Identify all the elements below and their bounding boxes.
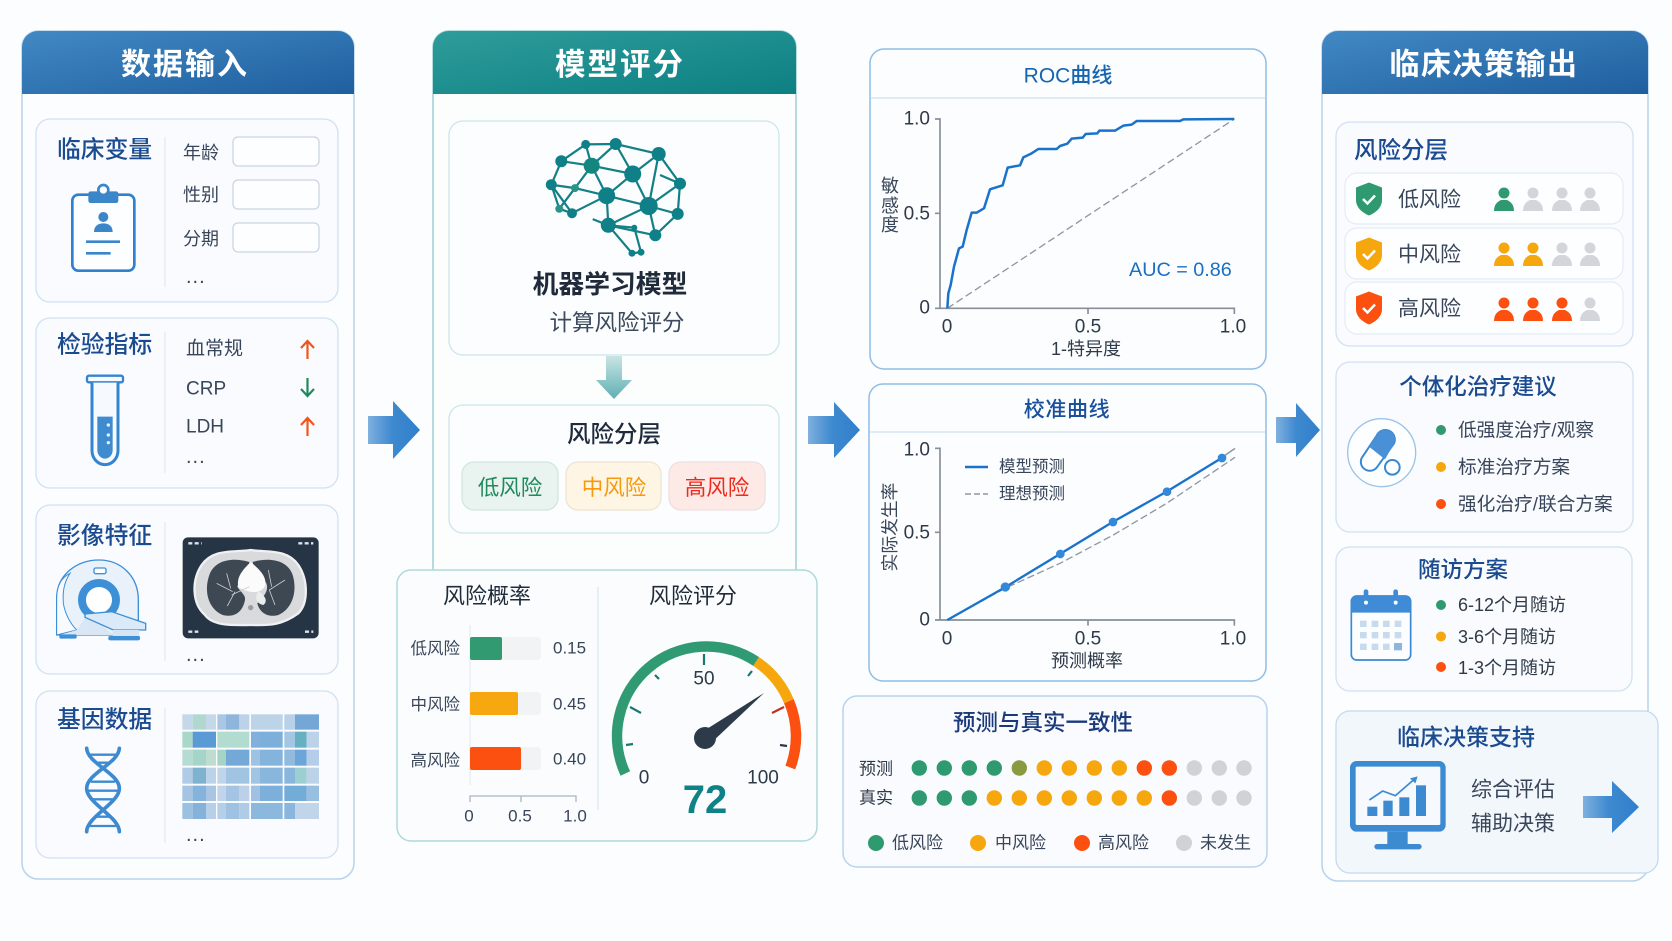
bar chart: risk probability: 低风险 — [410, 639, 460, 658]
panel: prediction vs actual agreement: 真实 — [859, 788, 893, 808]
bar chart: risk probability: 1.0 — [563, 806, 587, 826]
row: medium risk: 中风险 — [1398, 244, 1461, 266]
panel: calibration curve: 1.0 — [1220, 628, 1246, 650]
card: genomic data: ... — [186, 824, 206, 846]
card: imaging features — [36, 505, 338, 674]
legend: agreement — [868, 834, 1251, 852]
card: clinical variables: 年龄 — [183, 143, 219, 163]
panel: ROC curve: 度 — [881, 215, 899, 235]
panel: calibration curve: 校准曲线 — [1024, 398, 1110, 422]
card: follow-up plan: 1-3个月随访 — [1458, 658, 1556, 678]
row: low risk: 低风险 — [1398, 188, 1461, 212]
row: low risk — [1345, 173, 1623, 224]
panel: calibration curve: 0.5 — [1075, 628, 1101, 650]
gauge needle — [694, 693, 764, 749]
panel: ROC curve: 1.0 — [904, 108, 930, 130]
bar chart: risk probability: 高风险 — [410, 751, 460, 770]
icon: DNA helix — [87, 748, 119, 832]
gauge: risk score: 72 — [683, 778, 727, 822]
card: risk stratification: 风险分层 — [567, 421, 661, 447]
panel: ROC curve: 感 — [881, 196, 899, 216]
panel: data input — [22, 31, 354, 879]
gauge: risk score — [617, 584, 796, 822]
gauge: risk score: 100 — [747, 768, 779, 788]
card: lab indicators: CRP — [186, 378, 226, 400]
pill: high risk: 高风险 — [685, 476, 750, 500]
card: follow-up plan: 随访方案 — [1418, 558, 1508, 582]
card: personalized treatment — [1336, 362, 1633, 532]
card: machine learning model: 计算风险评分 — [549, 310, 685, 336]
panel: ROC curve: 1.0 — [1220, 316, 1246, 338]
pill: high risk — [669, 462, 765, 510]
legend: calibration — [965, 457, 1065, 503]
header: model scoring: 模型评分 — [555, 48, 685, 82]
card: follow-up plan — [1336, 547, 1632, 691]
card: follow-up plan: 3-6个月随访 — [1458, 627, 1556, 647]
icon: clipboard — [72, 185, 134, 271]
card: clinical decision support: 辅助决策 — [1471, 812, 1555, 836]
arrow: decision support — [1583, 781, 1639, 833]
gauge: risk score: 0 — [639, 768, 649, 788]
panel: prediction vs actual agreement: 预测 — [859, 760, 893, 778]
image: chest CT slice — [183, 537, 319, 638]
chart: ROC plot — [935, 119, 1234, 314]
card: risk stratification — [449, 405, 779, 533]
row: high risk — [1345, 282, 1623, 334]
card: personalized treatment: 强化治疗/联合方案 — [1458, 494, 1613, 514]
legend: agreement: 高风险 — [1098, 834, 1149, 852]
card: imaging features: 影像特征 — [57, 522, 152, 550]
icon: CT scanner — [57, 560, 146, 640]
panel: ROC curve — [870, 49, 1266, 369]
card: lab indicators: 检验指标 — [57, 332, 152, 358]
card: follow-up plan: 6-12个月随访 — [1458, 595, 1566, 615]
gauge: risk score: 50 — [693, 668, 715, 690]
panel: calibration curve: 0 — [919, 610, 930, 630]
card: clinical decision support — [1336, 711, 1658, 873]
card: lab indicators: ... — [186, 446, 206, 468]
bar chart: risk probability — [410, 584, 587, 826]
icon: pills — [1348, 419, 1416, 487]
bar chart: risk probability: 风险概率 — [443, 584, 531, 608]
header: data input: 数据输入 — [121, 48, 249, 82]
gauge: risk score: 风险评分 — [649, 584, 737, 608]
panel: calibration curve — [869, 384, 1266, 681]
arrow: validation to output — [1276, 403, 1320, 457]
bar chart: risk probability: 0.5 — [508, 806, 532, 826]
legend: calibration: 理想预测 — [999, 484, 1065, 503]
icon: neural network brain — [546, 138, 686, 257]
pill: low risk: 低风险 — [478, 476, 543, 500]
card: clinical variables — [36, 119, 338, 302]
panel: model scoring — [433, 31, 796, 575]
card: clinical variables: ... — [186, 266, 206, 288]
chart: calibration plot — [935, 448, 1235, 626]
card: personalized treatment: 个体化治疗建议 — [1399, 374, 1557, 400]
pill: medium risk — [566, 462, 661, 510]
bar chart: risk probability: 0.40 — [553, 750, 586, 768]
dots: predicted row — [912, 760, 1252, 776]
panel: prediction vs actual agreement — [843, 696, 1267, 867]
bar chart: risk probability: 0.15 — [553, 638, 586, 658]
icon: monitor with chart — [1350, 761, 1446, 849]
card: genomic data: 基因数据 — [57, 706, 152, 734]
card: risk probability and score — [397, 570, 817, 841]
icon: test tube — [87, 376, 123, 465]
card: risk stratification output: 风险分层 — [1354, 137, 1448, 163]
card: clinical variables: 性别 — [183, 185, 219, 205]
legend: agreement: 未发生 — [1200, 834, 1251, 852]
panel: calibration curve: 0.5 — [904, 522, 930, 544]
legend: calibration: 模型预测 — [999, 457, 1065, 476]
arrow: model to stratification — [596, 356, 632, 399]
arrow: input to model — [368, 401, 420, 459]
bar chart: risk probability: 0 — [464, 806, 474, 826]
card: lab indicators: LDH — [186, 416, 224, 438]
card: clinical variables: 临床变量 — [57, 136, 152, 164]
panel: calibration curve: 0 — [942, 628, 952, 650]
card: clinical variables: 分期 — [183, 229, 219, 249]
legend: agreement: 中风险 — [995, 834, 1046, 852]
card: genomic data — [36, 691, 338, 858]
panel: ROC curve: 0.5 — [904, 204, 930, 224]
header: model scoring — [433, 31, 796, 94]
card: clinical decision support: 综合评估 — [1471, 778, 1555, 802]
panel: ROC curve: 1-特异度 — [1051, 339, 1121, 359]
card: machine learning model: 机器学习模型 — [533, 270, 687, 299]
row: high risk: 高风险 — [1398, 298, 1461, 320]
card: risk stratification output — [1336, 122, 1633, 346]
row: medium risk — [1345, 228, 1623, 279]
panel: calibration curve: 预测概率 — [1051, 651, 1123, 671]
card: imaging features: ... — [186, 644, 206, 666]
card: lab indicators: 血常规 — [186, 338, 243, 360]
header: clinical decision output: 临床决策输出 — [1390, 48, 1578, 82]
bar chart: risk probability: 0.45 — [553, 694, 586, 714]
arrow: model to validation — [808, 402, 860, 458]
panel: clinical decision output — [1322, 31, 1658, 881]
card: clinical decision support: 临床决策支持 — [1397, 724, 1535, 750]
pill: medium risk: 中风险 — [582, 476, 647, 500]
legend: agreement: 低风险 — [892, 834, 943, 852]
card: lab indicators — [36, 318, 338, 488]
panel: calibration curve: 1.0 — [904, 440, 930, 460]
card: personalized treatment: 低强度治疗/观察 — [1458, 420, 1594, 440]
heatmap — [182, 714, 319, 819]
dots: actual row — [912, 790, 1252, 806]
card: personalized treatment: 标准治疗方案 — [1458, 456, 1570, 478]
panel: ROC curve: 0 — [919, 298, 930, 318]
panel: ROC curve: ROC曲线 — [1024, 64, 1112, 88]
icon: calendar — [1351, 589, 1411, 660]
header: data input — [22, 31, 354, 94]
panel: ROC curve: AUC = 0.86 — [1129, 259, 1232, 281]
card: machine learning model — [449, 121, 779, 355]
panel: ROC curve: 敏 — [881, 176, 899, 196]
panel: ROC curve: 0.5 — [1075, 316, 1101, 338]
panel: ROC curve: 0 — [942, 316, 952, 338]
header: clinical decision output — [1322, 31, 1648, 94]
panel: calibration curve: 实际发生率 — [880, 483, 900, 571]
pill: low risk — [462, 462, 558, 510]
bar chart: risk probability: 中风险 — [410, 695, 460, 714]
icon: trend arrows — [301, 341, 314, 436]
panel: prediction vs actual agreement: 预测与真实一致性 — [953, 710, 1133, 736]
